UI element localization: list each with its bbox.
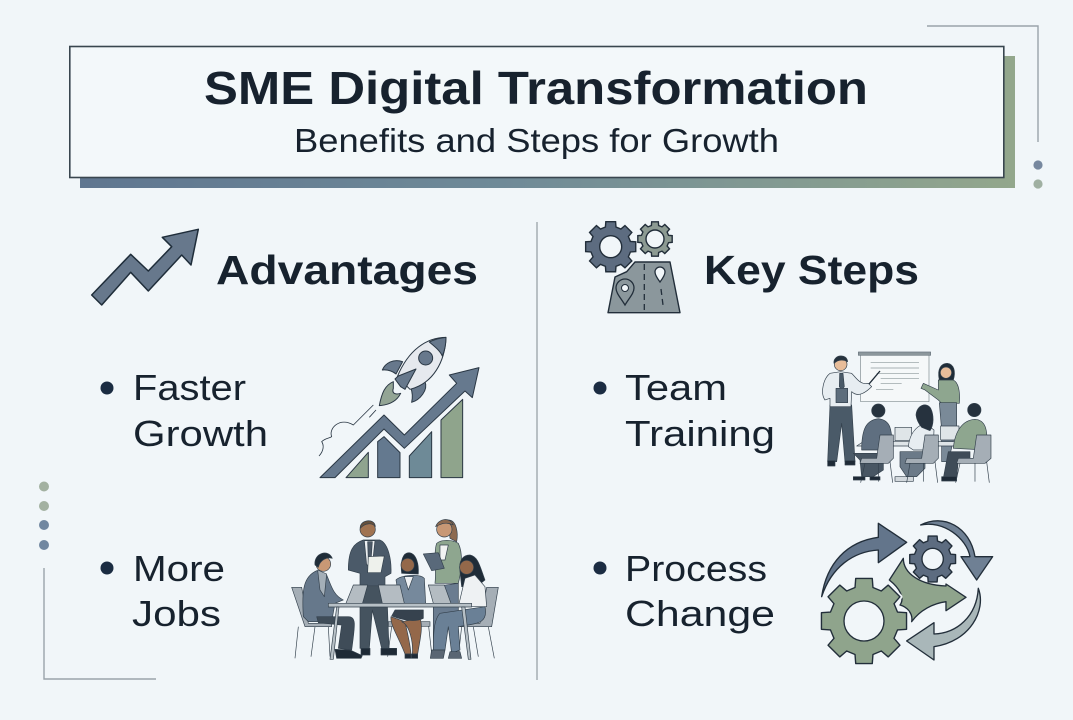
icon: gears and road map	[586, 222, 680, 313]
bullet: more jobs: Jobs	[132, 593, 221, 634]
column divider	[536, 222, 538, 680]
bullet: team training: Training	[625, 413, 775, 454]
bullet: process change: Process	[625, 548, 767, 589]
icon: gears and cycle arrows	[821, 521, 993, 664]
bullet: process change: Change	[625, 593, 775, 634]
decoration: top right dots	[1033, 160, 1043, 189]
icon: team meeting at table	[292, 520, 498, 659]
header shadow	[80, 56, 1015, 188]
panel: key steps	[586, 222, 993, 664]
decoration: bottom left dots	[39, 482, 49, 550]
panel: advantages	[92, 229, 498, 659]
title: SME Digital Transformation	[204, 62, 868, 114]
bullet: faster growth: Growth	[133, 413, 268, 454]
bullet: faster growth: Faster	[133, 367, 246, 408]
bullet: more jobs	[100, 548, 225, 634]
subtitle: Benefits and Steps for Growth	[294, 122, 779, 159]
header box	[70, 46, 1004, 178]
icon: upward zigzag arrow	[92, 229, 198, 305]
bullet: faster growth	[100, 367, 268, 454]
decoration: top right corner bracket	[927, 26, 1038, 142]
heading: advantages: Advantages	[216, 247, 478, 293]
bullet: more jobs: More	[133, 548, 225, 589]
icon: rocket over rising bars	[319, 337, 479, 478]
bullet: team training: Team	[625, 367, 727, 408]
heading: key steps: Key Steps	[704, 247, 919, 293]
bullet: process change	[594, 548, 775, 634]
header panel	[70, 46, 1015, 188]
icon: team training presentation	[823, 352, 991, 483]
decoration: bottom left corner bracket	[44, 568, 156, 679]
bullet: team training	[594, 367, 775, 454]
